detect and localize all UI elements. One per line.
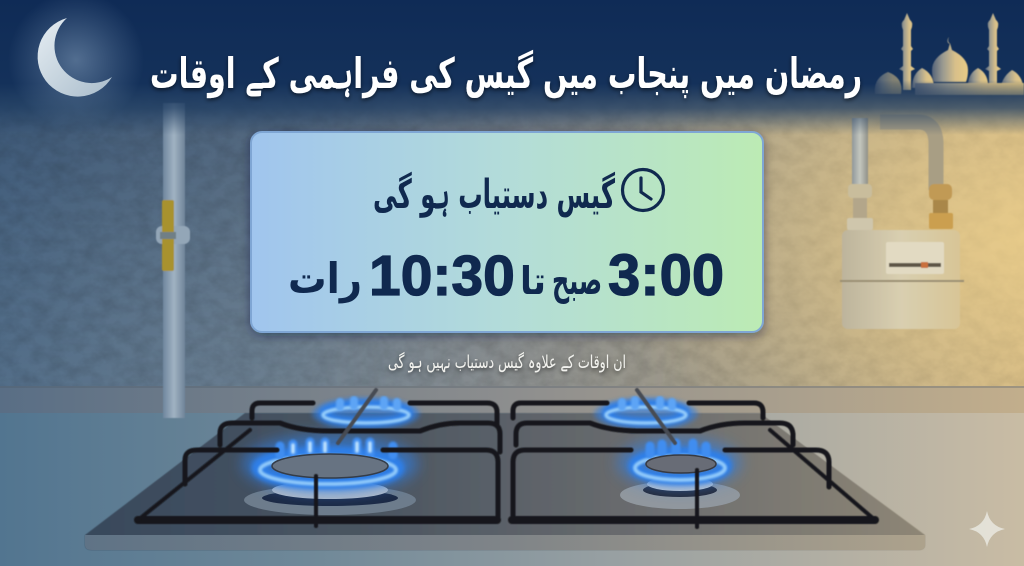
grates — [138, 390, 875, 527]
icon: mosque silhouette — [875, 13, 1024, 95]
icon: crescent moon — [8, 0, 144, 128]
label: morning: صبح — [552, 258, 602, 304]
top navy sky band — [0, 0, 1024, 135]
note text: ان اوقات کے علاوہ گیس دستیاب نہیں ہو گی — [388, 351, 626, 373]
burner: back right — [594, 398, 698, 430]
burner: back left — [312, 398, 420, 430]
background: kitchen wall — [0, 89, 1024, 386]
card: gas hours — [251, 132, 763, 332]
icon: clock — [622, 170, 664, 210]
time: 3:00: 3:00 — [608, 243, 724, 308]
time: 10:30: 10:30 — [369, 244, 515, 308]
label: to: تا — [520, 259, 546, 303]
gas meter with pipes — [840, 118, 964, 329]
burner: front left — [242, 434, 418, 515]
card heading: gas will be available: گیس دستیاب ہو گی — [373, 171, 615, 218]
label: night: رات — [288, 254, 362, 303]
icon: sparkle — [969, 511, 1005, 547]
gas stove — [85, 390, 925, 550]
left gas pipe with valve — [156, 103, 190, 418]
stove plate — [85, 413, 925, 550]
counter and backsplash ledge — [0, 386, 1024, 566]
burner: front right — [617, 437, 741, 509]
